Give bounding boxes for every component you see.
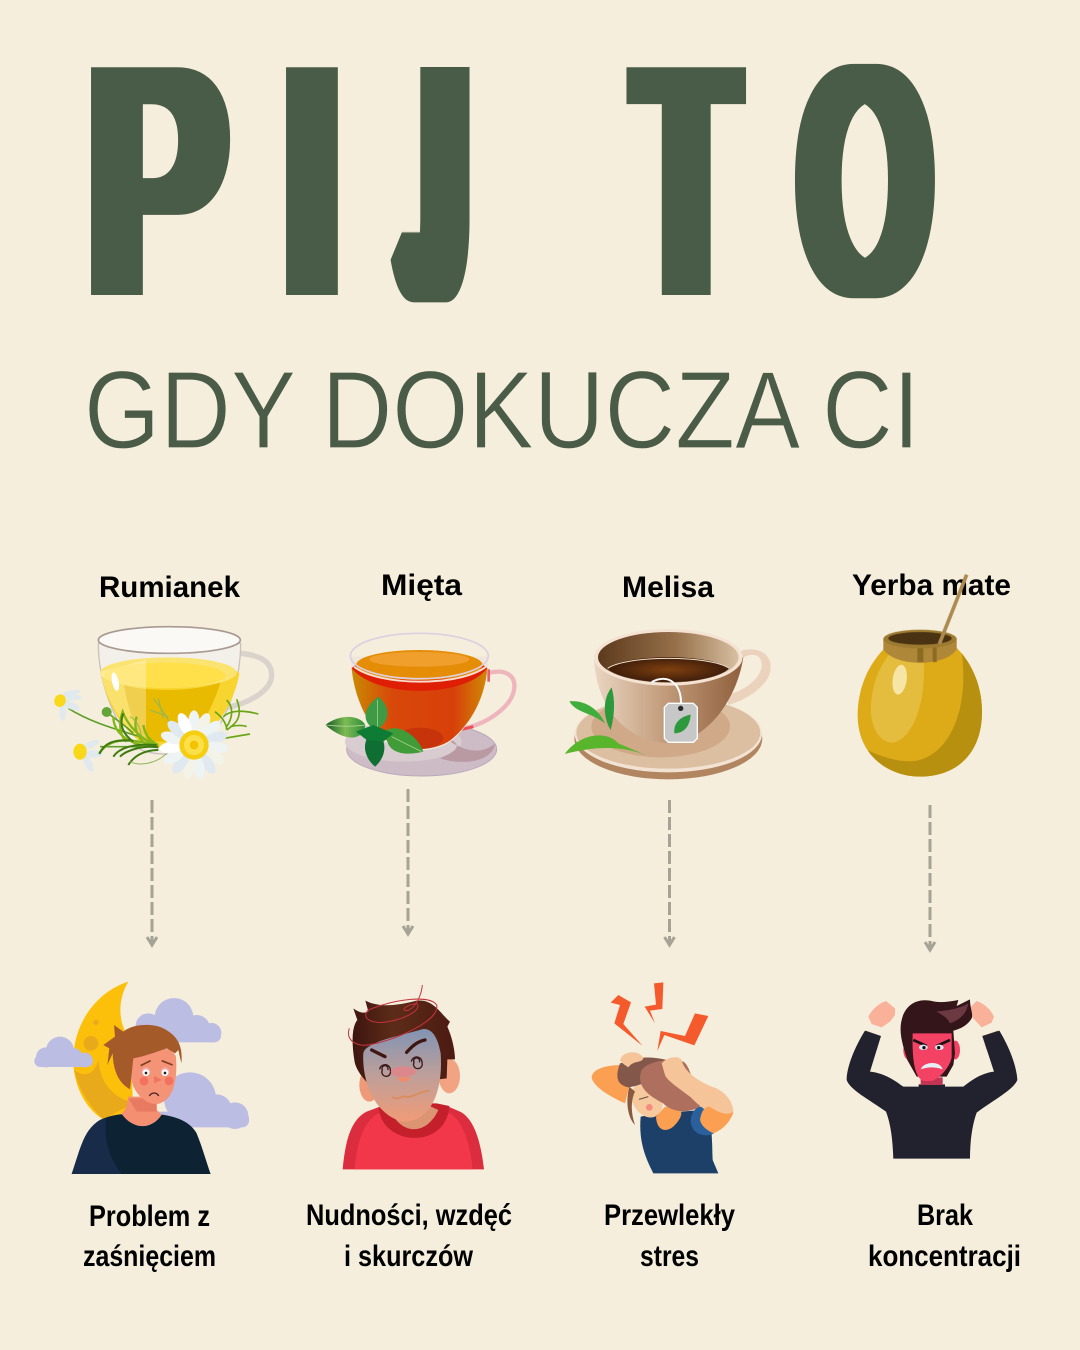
caption: Przewlekły stres [604,1199,735,1273]
subtitle: GDY DOKUCZA CI [84,349,920,472]
title [88,0,931,389]
caption: Nudności, wzdęć i skurczów [306,1199,512,1273]
shirt [72,1114,211,1174]
icon: yerba mate gourd [858,575,987,783]
large daisy [159,710,229,780]
caption: Problem z zaśnięciem: Problem z [89,1200,210,1233]
arrow: Rumianek [147,800,157,945]
caption: Problem z zaśnięciem: zaśnięciem [83,1240,216,1273]
caption: Przewlekły stres: stres [640,1240,699,1273]
tea bag [652,679,697,742]
head [103,1025,182,1126]
arrow: Melisa [664,800,674,945]
arrow: Mięta [403,789,413,934]
icon: chamomile tea cup [53,627,272,780]
clouds [34,998,249,1129]
caption: Przewlekły stres: Przewlekły [604,1199,735,1232]
small daisies and stems [53,689,258,773]
bombilla straw [939,575,967,644]
heading: Mięta: Mięta [381,569,462,602]
illustration: stressed woman holding head [592,982,733,1173]
illustration: sleepless man with moon and clouds [34,982,249,1174]
heading: Melisa: Melisa [622,571,714,604]
illustration: angry man [847,999,1017,1159]
caption: Problem z zaśnięciem [83,1200,216,1273]
caption: Brak koncentracji: Brak [917,1199,973,1232]
title: I [283,0,341,366]
green leaves [565,687,647,755]
title: O [799,0,931,365]
heading: Rumianek: Rumianek [99,571,240,604]
heading: Yerba mate: Yerba mate [852,569,1011,602]
caption: Nudności, wzdęć i skurczów: i skurczów [344,1240,474,1273]
dizzy swirl [348,985,437,1045]
caption: Nudności, wzdęć i skurczów: Nudności, wzdęć [306,1199,512,1232]
caption: Brak koncentracji: koncentracji [868,1240,1021,1273]
caption: Brak koncentracji [868,1199,1021,1273]
icon: mint tea cup [325,633,514,776]
lightning bolts [611,982,708,1051]
arrow: Yerba mate [925,805,935,950]
crescent moon [73,982,133,1119]
illustration: nauseous boy [343,985,484,1169]
mint leaves [325,697,423,767]
title: P [88,0,226,366]
title: T [638,0,735,366]
icon: black tea cup with tea bag [565,629,771,779]
